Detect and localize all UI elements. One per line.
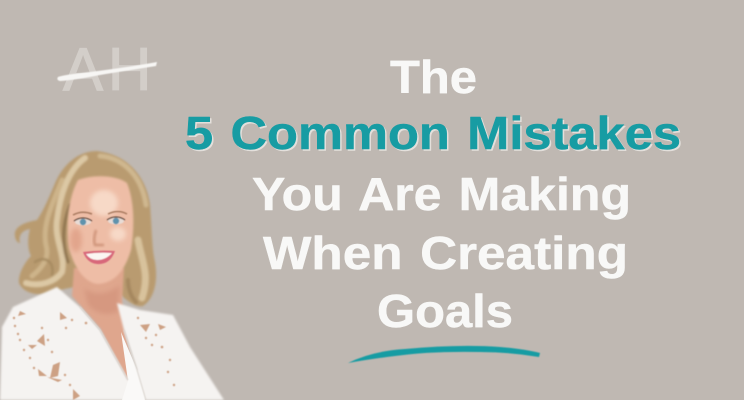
lace details xyxy=(13,311,175,400)
teal brush underline xyxy=(348,346,540,363)
blouse centre panel xyxy=(121,332,145,400)
heading line shadow: 5 Common Mistakes: 5 Common Mistakes xyxy=(186,108,682,160)
blouse xyxy=(0,287,224,400)
nose shadow xyxy=(94,230,104,245)
neck shadow xyxy=(84,285,120,314)
eyes xyxy=(74,217,125,225)
face xyxy=(68,176,133,284)
hair waves xyxy=(26,156,146,302)
logo: AH monogram: H xyxy=(108,36,151,103)
neck and chest xyxy=(72,268,134,381)
mouth xyxy=(83,251,115,264)
heading line: When Creating: When Creating xyxy=(263,227,628,279)
face highlights xyxy=(90,190,118,216)
logo: AH monogram xyxy=(57,36,157,103)
heading line: The: The xyxy=(390,51,477,103)
hair xyxy=(15,151,156,306)
heading line: 5 Common Mistakes: 5 Common Mistakes xyxy=(185,107,681,159)
heading line: Goals: Goals xyxy=(377,285,513,337)
logo: AH monogram: A xyxy=(63,36,103,103)
eyebrows xyxy=(73,212,127,215)
blouse collar shadows xyxy=(80,307,146,400)
headline xyxy=(185,51,682,337)
portrait of woman xyxy=(0,151,224,400)
heading line: You Are Making: You Are Making xyxy=(252,168,631,220)
